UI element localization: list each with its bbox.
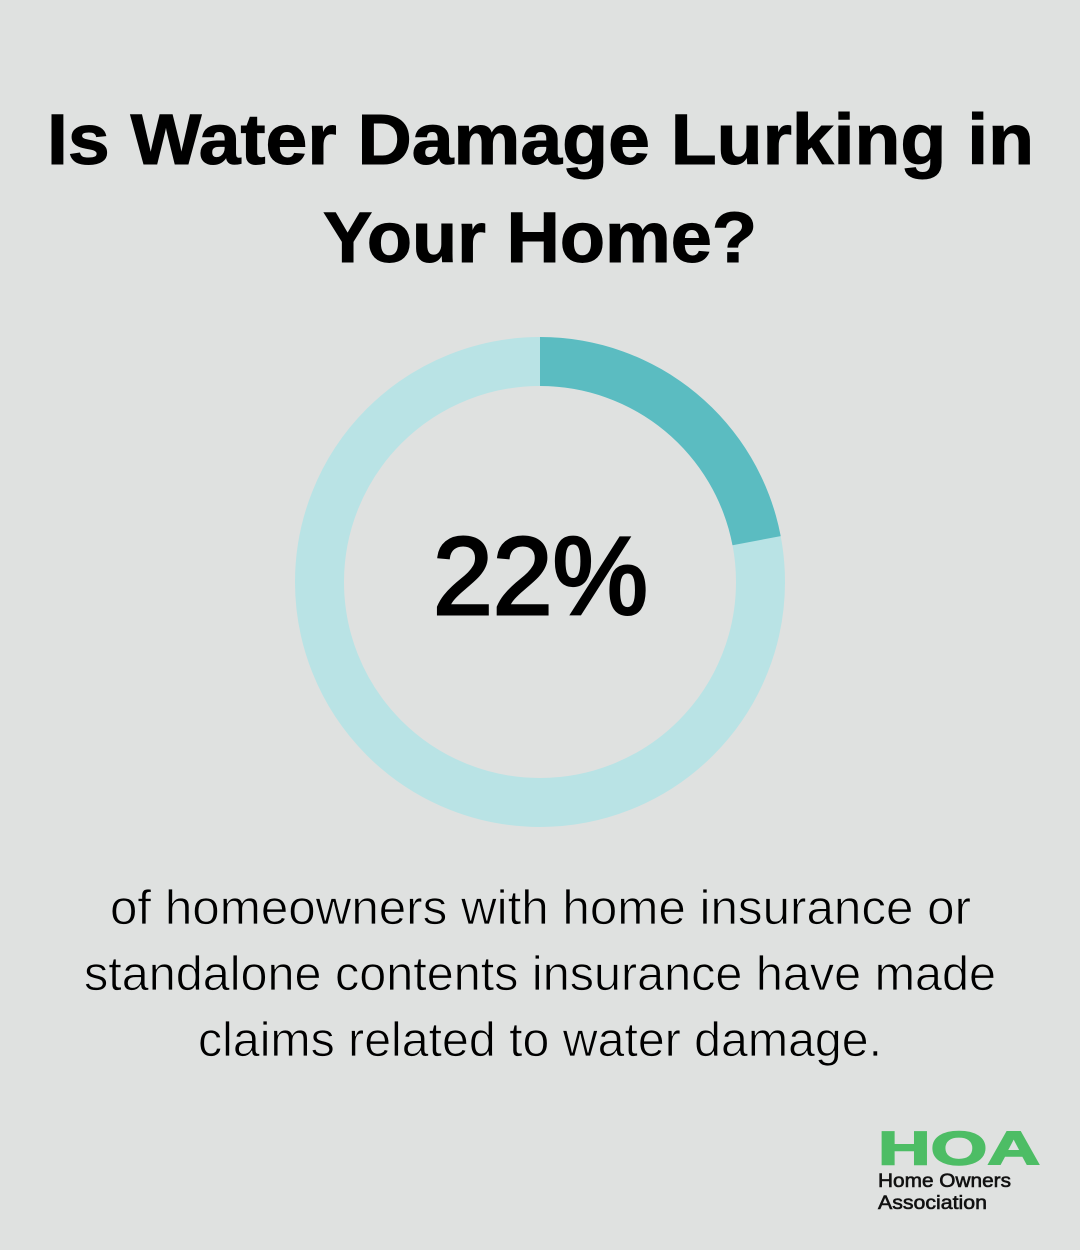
description text: standalone contents insurance have made <box>84 948 996 1001</box>
logo wordmark <box>878 1170 1011 1214</box>
logo wordmark: Home Owners <box>878 1170 1011 1192</box>
title: Is Water Damage Lurking in <box>47 101 1034 180</box>
description text: of homeowners with home insurance or <box>110 882 971 935</box>
title: Your Home? <box>323 199 757 278</box>
percentage value: 22% <box>433 515 648 638</box>
donut chart: 22% <box>320 337 781 802</box>
logo wordmark: Association <box>878 1192 987 1214</box>
donut track <box>320 362 760 802</box>
description text <box>84 882 996 1067</box>
donut highlighted segment <box>540 337 781 545</box>
logo mark: HOA <box>878 1122 1040 1174</box>
logo: HOA Home Owners Association <box>878 1122 1040 1214</box>
description text: claims related to water damage. <box>198 1014 882 1067</box>
title <box>47 101 1034 278</box>
